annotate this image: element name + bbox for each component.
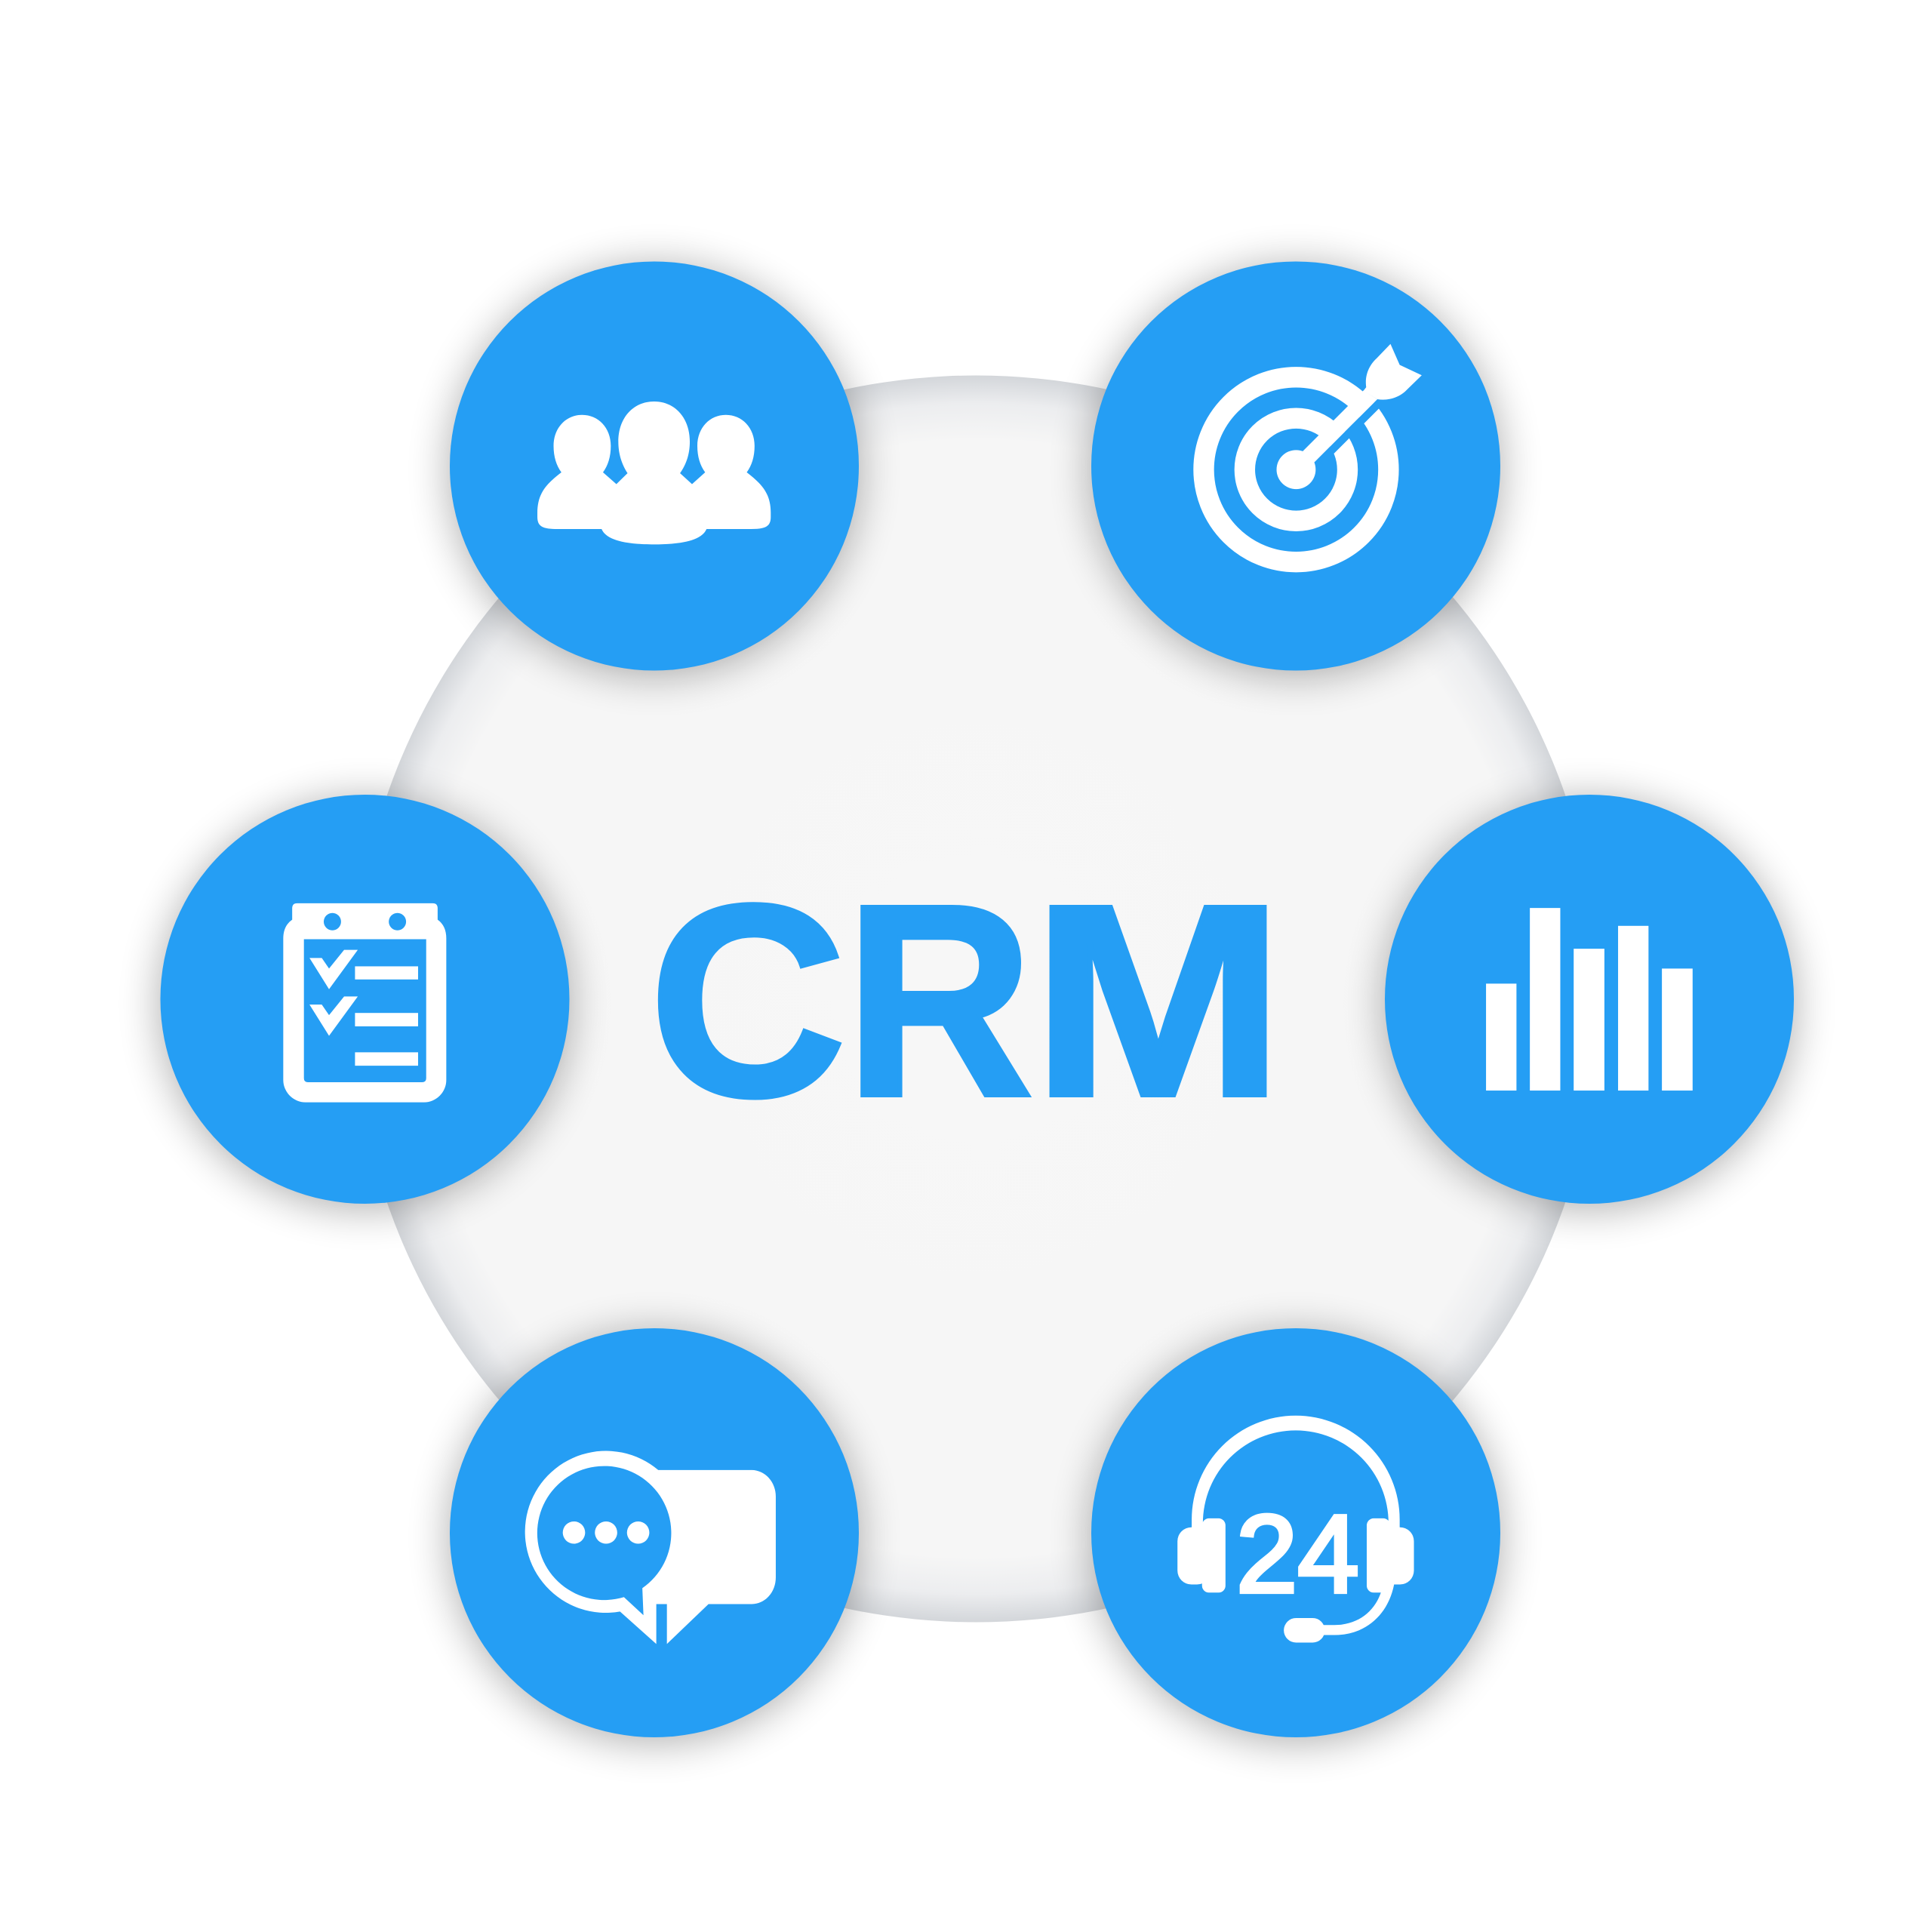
disc: checklist [160, 795, 569, 1204]
shadow: conversation [450, 1333, 859, 1742]
shadow: checklist [160, 799, 569, 1208]
title: CRM: M [1032, 848, 1284, 1153]
node: checklist [160, 795, 569, 1208]
disc: target [1091, 261, 1500, 670]
node: conversation [450, 1328, 859, 1742]
icon: 24 hour headset: 24 [1236, 1493, 1359, 1617]
disc: conversation [450, 1328, 859, 1737]
icon: speech bubbles [525, 1451, 776, 1644]
icon: 24 hour headset [1177, 1416, 1414, 1642]
shadow: target [1091, 266, 1500, 675]
shadow: analytics [1385, 799, 1794, 1208]
title: CRM: C [649, 848, 846, 1153]
icon: target with arrow [1204, 344, 1422, 562]
icon: clipboard checklist [283, 903, 446, 1103]
disc: support [1091, 1328, 1500, 1737]
node: target [1091, 261, 1500, 675]
node: analytics [1385, 795, 1794, 1208]
shadow: customers [450, 266, 859, 675]
icon: bar chart [1486, 908, 1693, 1091]
title: CRM: R [845, 848, 1033, 1153]
node: support [1091, 1328, 1500, 1742]
shadow: support [1091, 1333, 1500, 1742]
disc: customers [450, 261, 859, 670]
central hub circle [353, 376, 1600, 1623]
disc: analytics [1385, 795, 1794, 1204]
node: customers [450, 261, 859, 675]
icon: group of people [537, 401, 771, 544]
